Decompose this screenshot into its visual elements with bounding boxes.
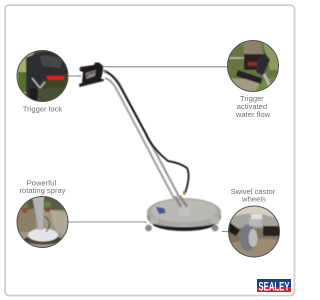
- label: trigger activated water flow: activated: [237, 102, 267, 111]
- lance poles: [104, 72, 184, 206]
- logo: Sealey: [257, 279, 291, 294]
- label: powerful rotating spray: Powerful: [27, 178, 57, 188]
- product: surface cleaner: [79, 62, 221, 231]
- label: powerful rotating spray: rotating spray: [19, 186, 66, 195]
- icon: trigger lock photo: [16, 50, 70, 104]
- label: trigger activated water flow: Trigger: [240, 94, 264, 103]
- castors: [150, 217, 158, 224]
- trigger gun: [79, 62, 106, 87]
- label: trigger lock: Trigger lock: [23, 104, 62, 114]
- label: trigger activated water flow: water flow: [235, 110, 271, 119]
- icon: trigger activated water flow photo: [226, 39, 280, 94]
- label: swivel castor wheels: Swivel castor: [231, 187, 276, 196]
- icon: powerful rotating spray photo: [16, 196, 70, 250]
- hose: [104, 70, 189, 193]
- connector lines: [68, 67, 228, 232]
- label: swivel castor wheels: wheels: [241, 194, 266, 204]
- label plate: [156, 207, 166, 214]
- icon: swivel castor wheels photo: [228, 205, 282, 260]
- mount block: [179, 205, 190, 216]
- disc base: [145, 191, 221, 231]
